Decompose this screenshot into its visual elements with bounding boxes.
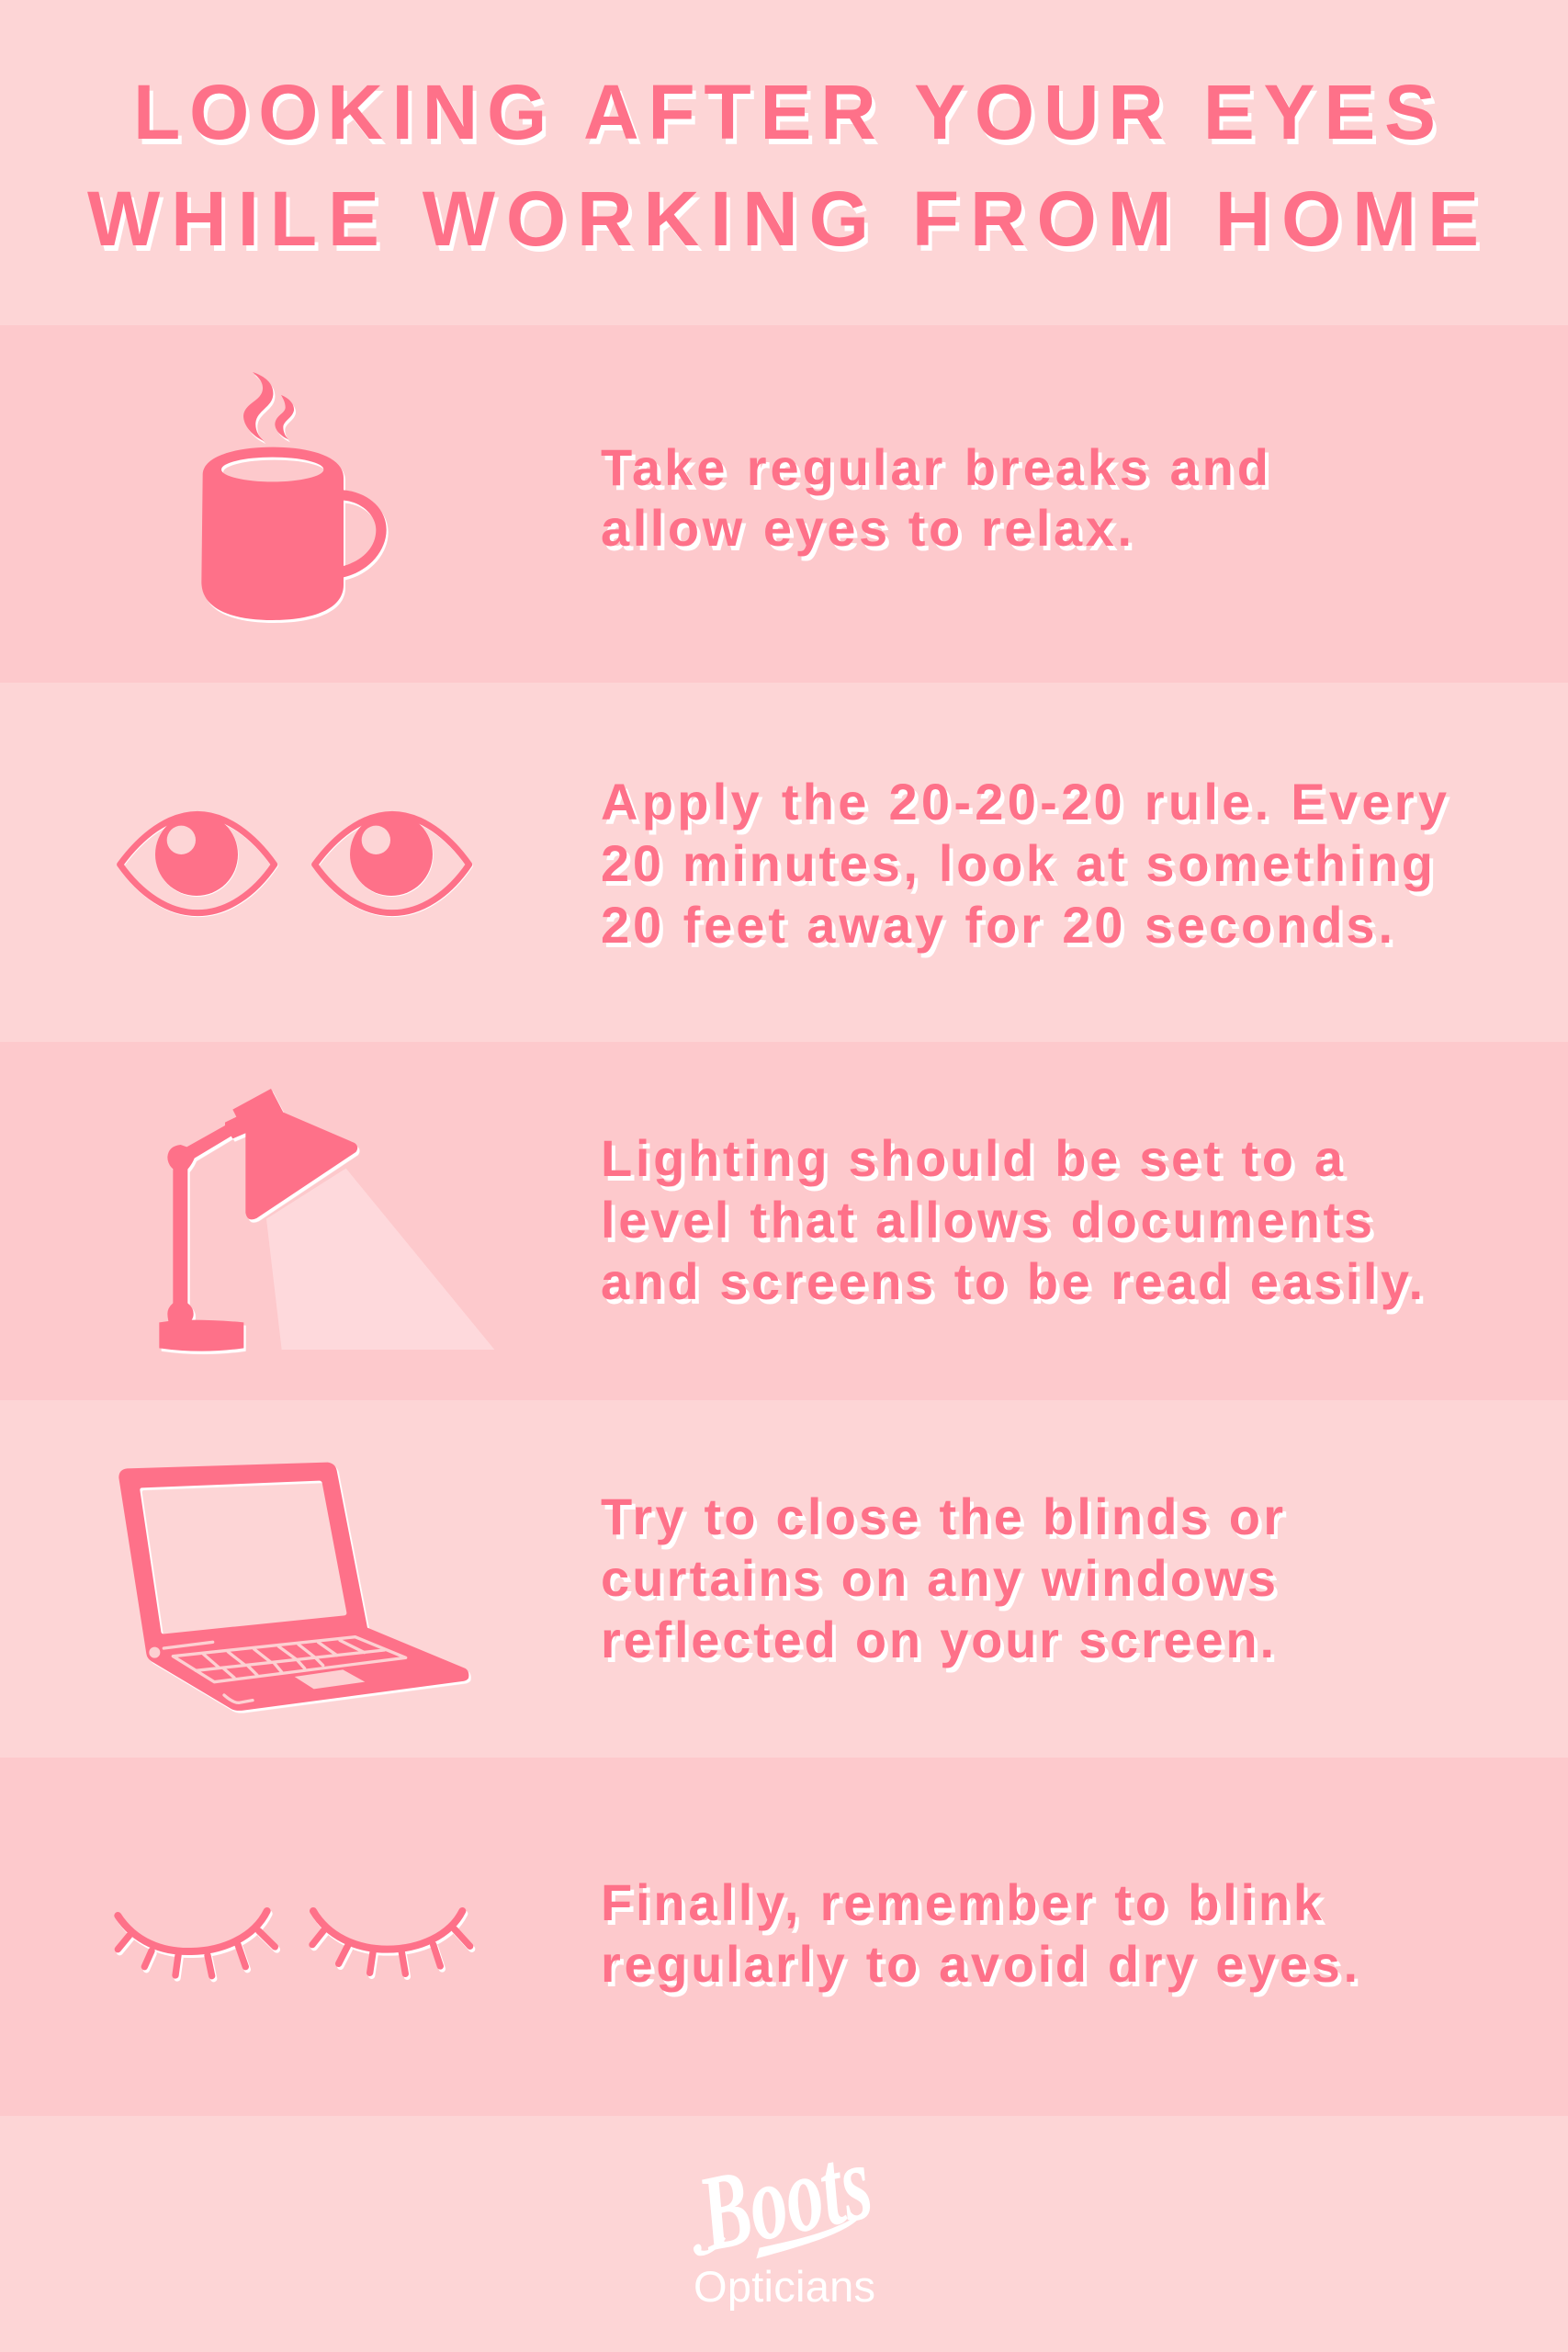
light beam: [266, 1169, 494, 1350]
panel: lighting: [0, 1042, 1568, 1400]
text: blinds and curtains: [601, 1487, 1283, 1668]
title: WHILE WORKING FROM HOME: [87, 175, 1479, 262]
text: lighting: level that allows documents: [601, 1191, 1372, 1249]
text: blink regularly: regularly to avoid dry eyes.: [601, 1935, 1358, 1993]
text: blinds and curtains: curtains on any windows: [601, 1549, 1276, 1607]
trackpad: [295, 1669, 365, 1689]
text: lighting: and screens to be read easily.: [601, 1252, 1423, 1310]
icon: left closed eye: [118, 1911, 275, 1976]
panel: blink regularly: [0, 1758, 1568, 2116]
text: 20-20-20 rule: 20 minutes, look at something: [601, 834, 1433, 892]
text: 20-20-20 rule: Apply the 20-20-20 rule. Every: [601, 773, 1447, 831]
logo swoosh: [694, 2210, 866, 2258]
lamp body: [159, 1089, 357, 1351]
text: blink regularly: [601, 1873, 1358, 1993]
text: blink regularly: Finally, remember to blink: [601, 1873, 1323, 1931]
text: take regular breaks: [601, 438, 1269, 557]
logo wordmark: Boots: Boots: [688, 2121, 881, 2275]
text: blinds and curtains: reflected on your screen.: [601, 1611, 1274, 1668]
panel: take regular breaks: [0, 325, 1568, 683]
power button: [149, 1647, 160, 1658]
icon: closed eyes: [118, 1911, 470, 1976]
text: take regular breaks: Take regular breaks and: [601, 438, 1269, 496]
text: lighting: [601, 1129, 1423, 1310]
icon: open eyes: [120, 813, 469, 913]
logo text: Opticians: Opticians: [694, 2262, 875, 2311]
title: [87, 69, 1479, 262]
text: blinds and curtains: Try to close the blinds or: [601, 1487, 1283, 1545]
status bar: [164, 1642, 213, 1648]
text: take regular breaks: allow eyes to relax.: [601, 499, 1132, 557]
panel: 20-20-20 rule: [0, 683, 1568, 1042]
text: 20-20-20 rule: [601, 773, 1447, 954]
icon: steaming mug: [201, 372, 387, 620]
icon: laptop: [118, 1463, 468, 1711]
front edge notch: [224, 1695, 253, 1702]
icon: desk lamp with light beam: [159, 1089, 494, 1351]
keyboard: [173, 1637, 406, 1682]
icon: right open eye: [315, 813, 469, 913]
logo: Boots Opticians: [688, 2121, 881, 2311]
icon: left open eye: [120, 813, 275, 913]
panel: blinds and curtains: [0, 1400, 1568, 1758]
icon: right closed eye: [312, 1911, 470, 1973]
title: LOOKING AFTER YOUR EYES: [133, 69, 1436, 155]
text: 20-20-20 rule: 20 feet away for 20 seconds.: [601, 896, 1393, 954]
text: lighting: Lighting should be set to a: [601, 1129, 1344, 1187]
